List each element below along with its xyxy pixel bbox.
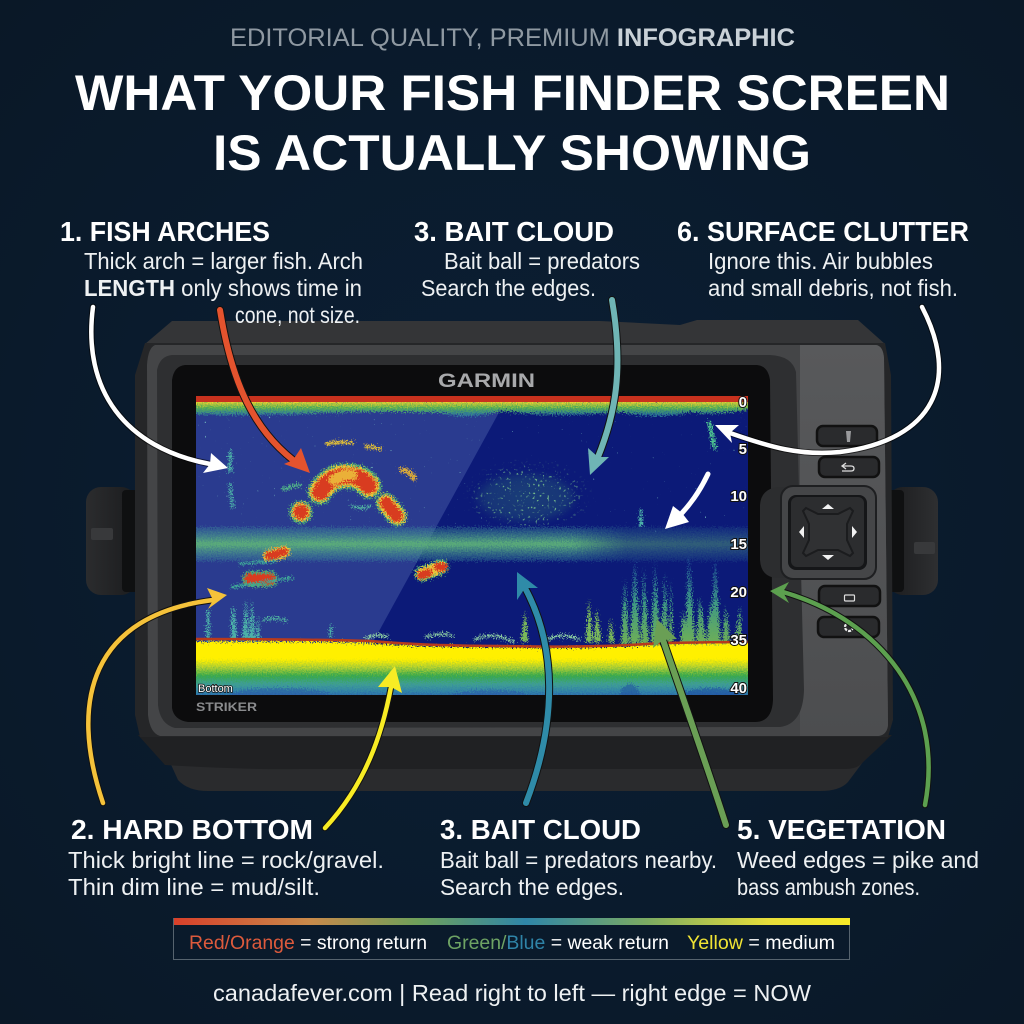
arrow: hard bottom gold — [88, 588, 227, 803]
device outer body edge — [135, 343, 893, 737]
sonar echoes with stippled edges — [186, 400, 760, 708]
device face — [147, 345, 888, 736]
eyebrow heading: EDITORIAL QUALITY, PREMIUM INFOGRAPHIC — [230, 24, 795, 52]
legend: Yellow = medium — [687, 933, 835, 954]
callout: 3 bait cloud bottom: Bait ball = predators nearby. — [440, 847, 717, 873]
title — [75, 65, 950, 181]
callout: 3 bait cloud top — [414, 216, 640, 301]
depth scale: 5 — [739, 441, 747, 458]
callout: 1 fish arches: cone, not size. — [235, 302, 360, 328]
device buttons — [817, 426, 880, 637]
lighter glare panel — [196, 402, 500, 646]
depth scale: 20 — [730, 584, 747, 601]
arrow: thermocline white — [665, 474, 708, 529]
depth scale: 10 — [730, 488, 747, 505]
small bottom arches — [365, 634, 580, 643]
keypad — [760, 486, 876, 579]
red surface band — [196, 396, 748, 402]
callout: 3 bait cloud bottom: 3. BAIT CLOUD — [440, 814, 641, 845]
device lower body — [138, 735, 892, 769]
scattered sparkle noise — [196, 412, 748, 537]
brand: GARMIN: GARMIN — [438, 371, 535, 392]
callout: 1 fish arches — [60, 216, 363, 328]
hard bottom — [196, 638, 748, 695]
callout: 6 surface clutter: Ignore this. Air bubbles — [708, 248, 933, 274]
label: bottom: Bottom — [198, 683, 233, 695]
callout: 3 bait cloud top: 3. BAIT CLOUD — [414, 216, 614, 247]
thermocline band — [190, 527, 755, 561]
depth scale: 35 — [730, 632, 747, 649]
callout: 3 bait cloud bottom: Search the edges. — [440, 874, 624, 900]
title: WHAT YOUR FISH FINDER SCREEN — [75, 65, 950, 121]
sonar screen — [186, 394, 760, 708]
icon: right knob — [888, 487, 938, 595]
fish arches — [232, 442, 444, 620]
callout: 2 hard bottom: Thick bright line = rock/gravel. — [68, 847, 384, 873]
title: IS ACTUALLY SHOWING — [213, 125, 811, 181]
bait cloud — [466, 459, 592, 532]
arrow: vegetation right green — [770, 582, 929, 805]
arrow: vegetation green — [653, 619, 726, 825]
device: fish finder — [86, 320, 938, 791]
device base foot — [168, 758, 866, 791]
brand: STRIKER: STRIKER — [196, 702, 258, 714]
right side panel — [800, 345, 888, 736]
arrow: bait cloud blue — [517, 572, 549, 803]
depth scale: 0 — [739, 394, 747, 411]
arrow: hard bottom yellow — [325, 666, 402, 828]
vertical clutter streaks — [206, 420, 717, 642]
depth scale — [730, 394, 747, 697]
depth scale: 15 — [730, 536, 747, 553]
callout: 3 bait cloud bottom — [440, 814, 717, 900]
vegetation — [621, 552, 742, 644]
callout: 3 bait cloud top: Bait ball = predators — [444, 248, 640, 274]
device upper hood — [145, 320, 885, 344]
callout: 3 bait cloud top: Search the edges. — [421, 275, 596, 301]
legend: Green/Blue = weak return — [447, 933, 669, 954]
callout: 5 vegetation — [737, 814, 979, 900]
callout: 2 hard bottom: 2. HARD BOTTOM — [71, 814, 313, 845]
depth scale: 40 — [730, 680, 747, 697]
arrow: surface clutter white — [715, 307, 939, 453]
callout: 1 fish arches: 1. FISH ARCHES — [60, 216, 270, 247]
inner bezel recess — [157, 355, 804, 728]
callout: 6 surface clutter: and small debris, not fish. — [708, 275, 958, 301]
screen glass — [172, 365, 773, 722]
callout: 2 hard bottom — [68, 814, 384, 900]
legend: Red/Orange = strong return — [189, 933, 427, 954]
callout: 5 vegetation: bass ambush zones. — [737, 874, 920, 900]
callout: 5 vegetation: Weed edges = pike and — [737, 847, 979, 873]
arrow: fish arches red — [220, 310, 310, 473]
surface clutter band — [190, 400, 755, 416]
legend — [174, 918, 850, 960]
callout: 5 vegetation: 5. VEGETATION — [737, 814, 946, 845]
icon: left knob — [86, 487, 138, 595]
arrow: bait cloud teal — [588, 300, 617, 475]
callout: 6 surface clutter — [677, 216, 969, 301]
callout: 1 fish arches: Thick arch = larger fish. Arch — [84, 248, 363, 274]
footer: canadafever.com | Read right to left — right edge = NOW — [213, 980, 811, 1006]
callout: 2 hard bottom: Thin dim line = mud/silt. — [68, 874, 320, 900]
arrow: fish arches white — [91, 307, 228, 473]
callout: 1 fish arches: LENGTH only shows time in — [84, 275, 362, 301]
callout: 6 surface clutter: 6. SURFACE CLUTTER — [677, 216, 969, 247]
bottom red return line — [196, 639, 748, 647]
